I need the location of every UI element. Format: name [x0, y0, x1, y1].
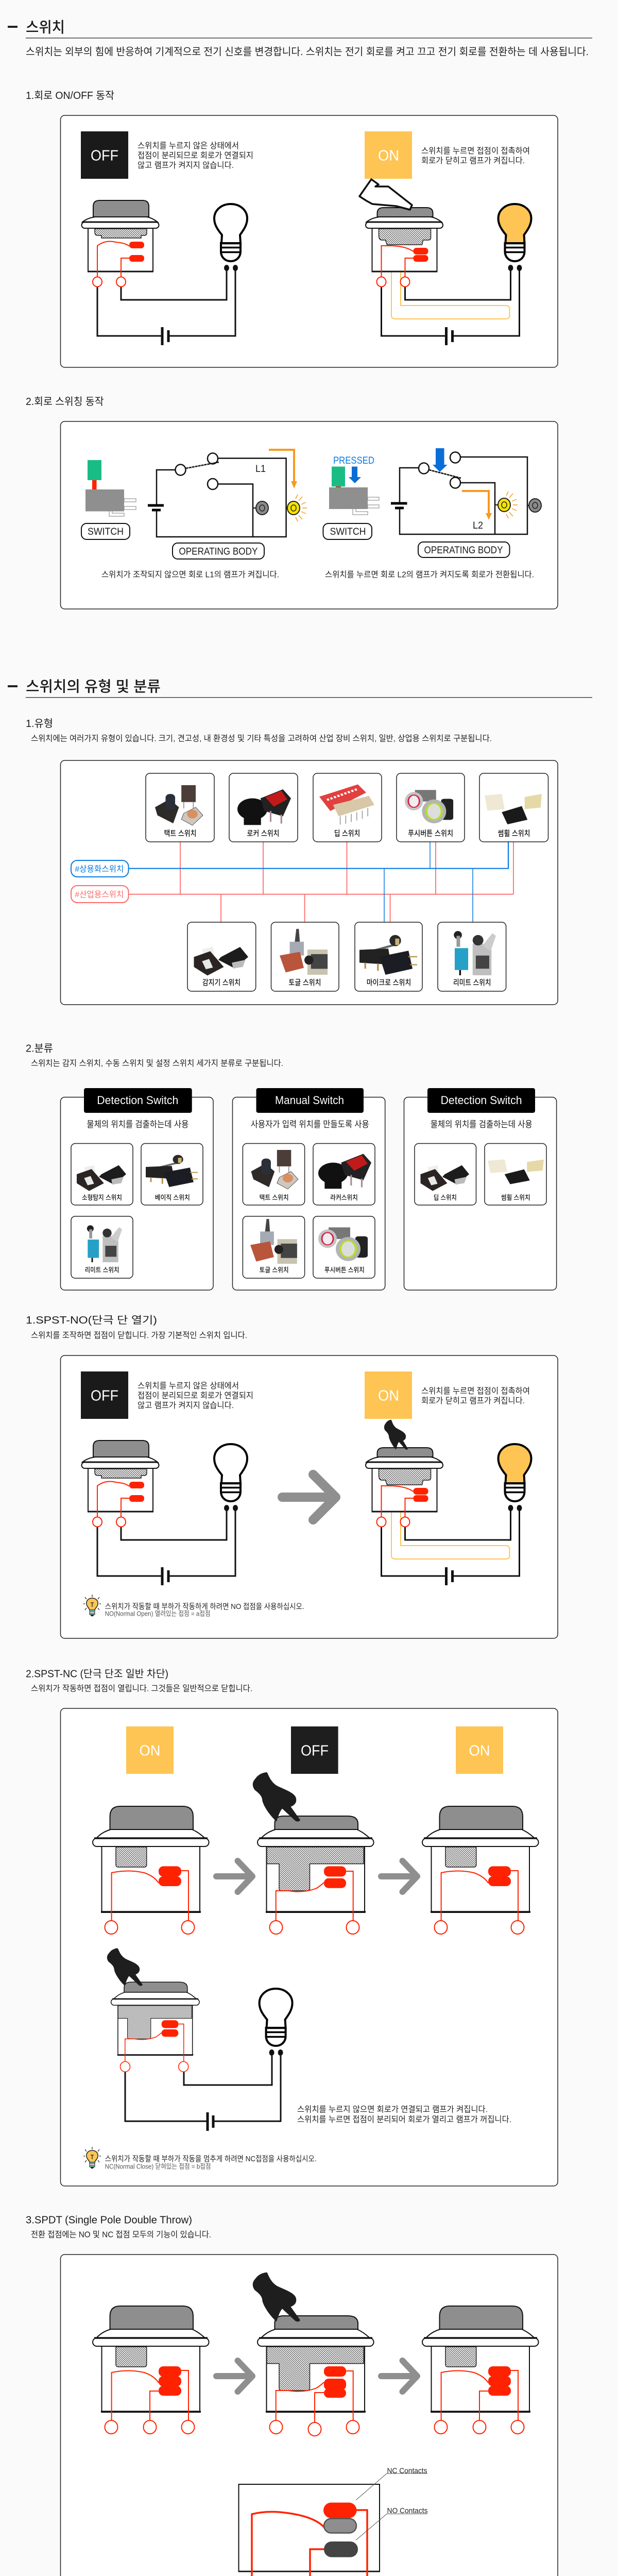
icon: pressing hand [359, 179, 412, 210]
SWITCH label right: SWITCH [330, 527, 366, 537]
OFF description: 스위치를 누르지 않은 상태에서 [138, 141, 239, 150]
ON badge: ON [378, 1388, 399, 1404]
explanation [297, 2105, 511, 2124]
OFF description: 스위치를 누르지 않은 상태에서 [138, 1381, 239, 1391]
OFF description: 접점이 분리되므로 회로가 연결되지 [138, 1391, 253, 1400]
icon: hand [253, 1772, 300, 1822]
OFF description [138, 1381, 253, 1410]
SPDT description: 전환 접점에는 NO 및 NC 접점 모두의 기능이 있습니다. [31, 2230, 211, 2240]
ON description [421, 1386, 530, 1405]
OFF circuit [81, 1440, 247, 1585]
OPERATING BODY label right [418, 542, 510, 557]
connector lines [129, 842, 513, 922]
tip: 스위치가 작동할 때 부하가 작동을 멈추게 하려면 NC접점을 사용하십시오. [105, 2155, 317, 2163]
card: 토글 스위치: 토글 스위치 [288, 978, 321, 987]
arrow [282, 1475, 336, 1520]
ON badge [365, 131, 412, 179]
card: 썸휠 스위치: 썸휠 스위치 [497, 829, 530, 838]
card: 감지기 스위치 [187, 922, 256, 991]
switch 2 pressed [258, 2316, 374, 2436]
title tab [427, 1088, 535, 1113]
card: 베이직 스위치 [141, 1144, 203, 1205]
card: 썸휠 스위치: 썸휠 스위치 [501, 1194, 530, 1201]
OFF badge: OFF [301, 1742, 329, 1759]
types description: 스위치에는 여러가지 유형이 있습니다. 크기, 견고성, 내 환경성 및 기타 특성을 고려하여 산업 장비 스위치, 일반, 상업용 스위치로 구분됩니다. [31, 734, 492, 743]
ON badge 2 [456, 1726, 503, 1774]
contact diagram [238, 2484, 380, 2576]
card: 소형탐지 스위치: 소형탐지 스위치 [82, 1194, 122, 1201]
icon: hand [107, 1948, 143, 1986]
OFF badge: OFF [91, 147, 118, 164]
left circuit [148, 450, 307, 537]
icon: hand [253, 2273, 300, 2321]
card: 택트 스위치 [146, 773, 214, 842]
ON badge 1 [126, 1726, 174, 1774]
tag: 상용화: #상용화스위치 [75, 865, 124, 874]
ON circuit [366, 1444, 531, 1585]
OFF badge [81, 1371, 128, 1419]
description: 물체의 위치를 검출하는데 사용 [431, 1120, 533, 1129]
OPERATING BODY label left: OPERATING BODY [179, 546, 258, 557]
SWITCH label [81, 523, 130, 539]
ON description: 스위치를 누르면 접점이 접촉하여 [421, 146, 530, 156]
card: 소형탐지 스위치 [71, 1144, 133, 1205]
card: 딥 스위치: 딥 스위치 [334, 829, 360, 838]
card: 토글 스위치 [243, 1216, 305, 1278]
subheading: SPST-NC: 2.SPST-NC (단극 단조 일반 차단) [26, 1668, 168, 1680]
card: 딥 스위치 [415, 1144, 476, 1205]
tip: NC(Normal Close) 닫혀있는 접점 = b접점 [105, 2163, 211, 2171]
left switch illustration [85, 460, 136, 516]
title tab: Detection Switch [97, 1094, 178, 1107]
subheading: 회로 ON/OFF 동작: 1.회로 ON/OFF 동작 [26, 90, 114, 101]
tip [83, 1595, 304, 1618]
panel: ON/OFF operation [61, 115, 558, 367]
SWITCH label: SWITCH [88, 527, 124, 537]
OFF badge [81, 131, 128, 179]
switch 2 pressed [258, 1816, 374, 1934]
card: 베이직 스위치: 베이직 스위치 [155, 1194, 190, 1201]
ON badge: ON [378, 147, 399, 164]
OFF circuit: switch, lamp, battery [81, 200, 247, 345]
tag: 상용화 [71, 860, 129, 877]
card: 택트 스위치 [243, 1144, 305, 1205]
arrow 1 [216, 1861, 252, 1892]
OFF description: 않고 램프가 켜지지 않습니다. [138, 161, 234, 170]
card: 감지기 스위치: 감지기 스위치 [202, 978, 241, 987]
ON description: 회로가 닫히고 램프가 켜집니다. [421, 1396, 525, 1405]
subheading: 분류: 2.분류 [26, 1043, 53, 1054]
panel: Detection Switch [61, 1088, 213, 1290]
heading: 스위치의 유형 및 분류 [8, 678, 592, 698]
panel: SPDT [61, 2255, 558, 2576]
L1 label: L1 [255, 464, 266, 474]
right circuit [391, 448, 541, 534]
subheading: 회로 스위칭 동작: 2.회로 스위칭 동작 [26, 396, 104, 408]
card: 딥 스위치: 딥 스위치 [434, 1194, 457, 1201]
SPST-NC description: 스위치가 작동하면 접점이 열립니다. 그것들은 일반적으로 닫힙니다. [31, 1684, 252, 1693]
switch 3 closed [422, 1806, 539, 1934]
card: 리미트 스위치 [71, 1216, 133, 1278]
card: 라커스위치: 라커스위치 [330, 1194, 358, 1201]
title tab: Detection Switch [441, 1094, 522, 1107]
SPST-NO description: 스위치를 조작하면 접점이 닫힙니다. 가장 기본적인 스위치 입니다. [31, 1331, 247, 1340]
ON description: 스위치를 누르면 접점이 접촉하여 [421, 1386, 530, 1396]
card: 라커스위치 [313, 1144, 375, 1205]
OFF description: 않고 램프가 켜지지 않습니다. [138, 1401, 234, 1410]
right switch illustration [329, 467, 379, 515]
OFF badge [291, 1726, 338, 1774]
heading: 스위치: 스위치 [26, 19, 65, 36]
card: 택트 스위치: 택트 스위치 [164, 829, 197, 838]
heading: 스위치의 유형 및 분류: 스위치의 유형 및 분류 [26, 678, 161, 696]
card: 딥 스위치 [313, 773, 382, 842]
circuit with lamp [111, 1982, 293, 2131]
subheading: SPST-NO: 1.SPST-NO(단극 단 열기) [26, 1314, 157, 1326]
tag: 산업용: #산업용스위치 [75, 890, 124, 900]
card: 푸시버튼 스위치: 푸시버튼 스위치 [324, 1266, 365, 1274]
switch 1 [93, 2306, 209, 2434]
card: 토글 스위치 [271, 922, 339, 991]
card: 로커 스위치 [229, 773, 298, 842]
ON badge [365, 1371, 412, 1419]
OFF badge: OFF [91, 1388, 118, 1404]
SWITCH label right [323, 523, 372, 539]
arrow 1 [216, 2361, 252, 2392]
panel: switching operation [61, 421, 558, 609]
card: 토글 스위치: 토글 스위치 [260, 1266, 289, 1274]
OPERATING BODY label right: OPERATING BODY [424, 545, 503, 556]
explanation: 스위치를 누르지 않으면 회로가 연결되고 램프가 켜집니다. [297, 2105, 488, 2114]
ON description: 회로가 닫히고 램프가 켜집니다. [421, 156, 525, 165]
tag: 산업용 [71, 886, 129, 903]
panel: SPST-NO [61, 1355, 558, 1638]
classification description: 스위치는 감지 스위치, 수동 스위치 및 설정 스위치 세가지 분류로 구분됩니다. [31, 1059, 283, 1068]
card: 마이크로 스위치 [355, 922, 422, 991]
ON badge 2: ON [469, 1742, 490, 1759]
panel: Detection Switch (setting) [404, 1088, 557, 1290]
callout: NC Contacts [356, 2467, 427, 2500]
title tab [84, 1088, 192, 1113]
card: 마이크로 스위치: 마이크로 스위치 [367, 978, 411, 987]
title tab: Manual Switch [275, 1094, 344, 1107]
title tab [256, 1088, 364, 1113]
panel: SPST-NC [61, 1708, 558, 2186]
L2 label: L2 [473, 520, 483, 531]
switch 3 [422, 2306, 539, 2434]
caption left: 스위치가 조작되지 않으면 회로 L1의 램프가 켜집니다. [101, 570, 279, 579]
OFF description: 접점이 분리되므로 회로가 연결되지 [138, 151, 253, 160]
card: 리미트 스위치: 리미트 스위치 [453, 978, 491, 987]
ON description [421, 146, 530, 165]
card: 로커 스위치: 로커 스위치 [247, 829, 279, 838]
card: 썸휠 스위치 [479, 773, 548, 842]
callout: NO Contacts [356, 2506, 427, 2540]
card: 썸휠 스위치 [485, 1144, 546, 1205]
OFF description [138, 141, 253, 170]
card: 푸시버튼 스위치 [313, 1216, 375, 1278]
card: 택트 스위치: 택트 스위치 [260, 1194, 289, 1201]
switch 1 closed [93, 1806, 209, 1934]
callout: NO Contacts: NO Contacts [387, 2506, 427, 2515]
explanation: 스위치를 누르면 접점이 분리되어 회로가 열리고 램프가 꺼집니다. [297, 2115, 511, 2124]
ON badge 1: ON [139, 1742, 161, 1759]
OPERATING BODY label left [173, 543, 264, 559]
panel: Manual Switch [233, 1088, 385, 1290]
card: 푸시버튼 스위치: 푸시버튼 스위치 [408, 829, 453, 838]
card: 리미트 스위치: 리미트 스위치 [84, 1266, 119, 1274]
intro text: 스위치는 외부의 힘에 반응하여 기계적으로 전기 신호를 변경합니다. 스위치는 전기 회로를 켜고 끄고 전기 회로를 전환하는 데 사용됩니다. [26, 46, 589, 58]
PRESSED label: PRESSED [333, 455, 374, 466]
ON circuit: switch, lamp, battery [366, 204, 531, 345]
panel: switch types [61, 760, 558, 1005]
subheading: SPDT: 3.SPDT (Single Pole Double Throw) [26, 2215, 192, 2226]
description: 물체의 위치를 검출하는데 사용 [87, 1120, 188, 1129]
icon: hand [384, 1420, 408, 1450]
arrow 2 [381, 1861, 417, 1892]
caption right: 스위치를 누르면 회로 L2의 램프가 켜지도록 회로가 전환됩니다. [325, 570, 534, 579]
arrow 2 [381, 2361, 417, 2392]
description: 사용자가 입력 위치를 만들도록 사용 [251, 1120, 369, 1129]
subheading: 유형: 1.유형 [26, 718, 53, 730]
heading: 스위치 [8, 19, 592, 38]
card: 푸시버튼 스위치 [397, 773, 465, 842]
tip: 스위치가 작동할 때 부하가 작동하게 하려면 NO 접점을 사용하십시오. [105, 1602, 304, 1611]
callout: NC Contacts: NC Contacts [387, 2467, 427, 2475]
card: 리미트 스위치 [438, 922, 506, 991]
tip [83, 2147, 317, 2171]
tip: NO(Normal Open) 열려있는 접점 = a접점 [105, 1610, 211, 1618]
